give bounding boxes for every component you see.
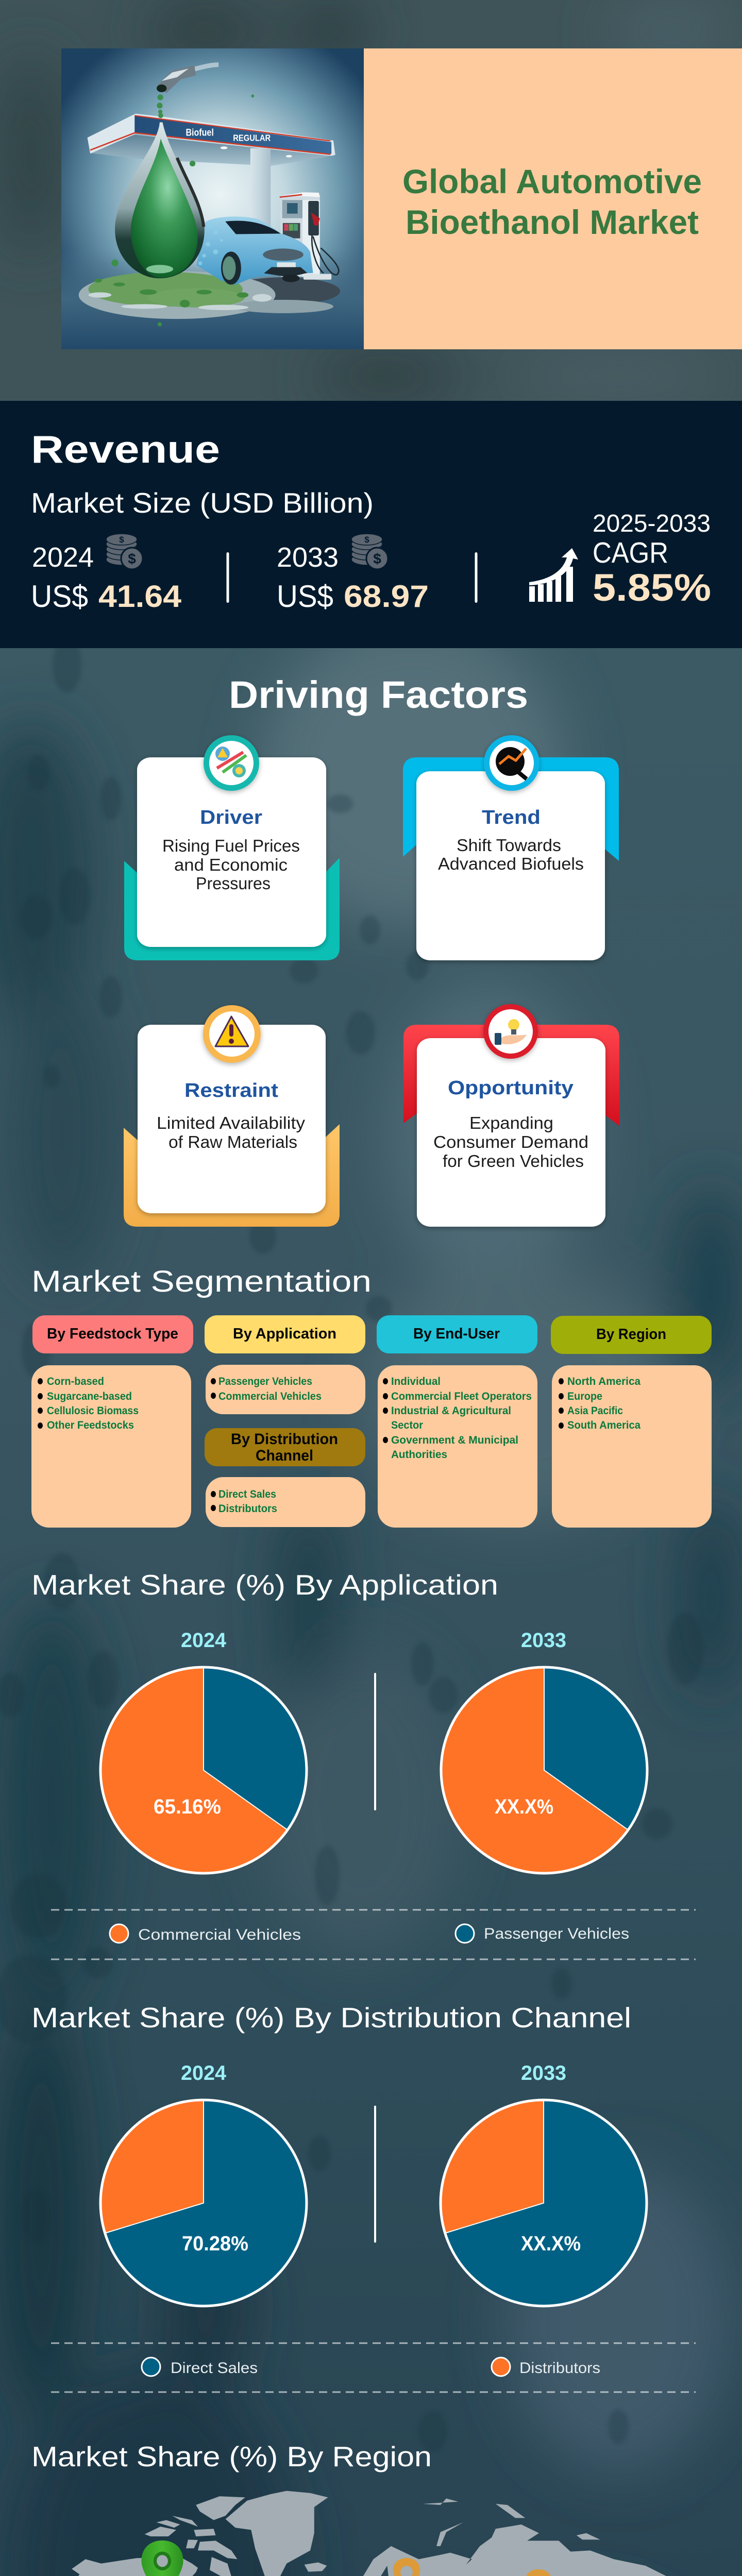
- card text: Consumer Demand: [433, 1132, 588, 1151]
- list: region items: Europe: [567, 1391, 602, 1402]
- panel: by distribution channel: By Distribution: [231, 1431, 338, 1448]
- list: application items: Passenger Vehicles: [218, 1376, 312, 1387]
- list: end-user items: Authorities: [391, 1449, 447, 1461]
- icon: restraint warning: [203, 1005, 261, 1063]
- list: end-user items: Commercial Fleet Operators: [391, 1391, 532, 1402]
- icon: coins: [106, 534, 143, 569]
- panel: by feedstock type: [31, 1315, 193, 1528]
- chart: distribution pie 2024: [100, 2062, 307, 2306]
- panel: by feedstock type: By Feedstock Type: [47, 1326, 178, 1342]
- panel: revenue: [0, 401, 742, 648]
- stat: CAGR: [593, 510, 711, 609]
- title text: Bioethanol Market: [406, 203, 699, 241]
- chart: world map: [72, 2491, 667, 2576]
- list: feedstock items: Other Feedstocks: [47, 1419, 134, 1431]
- icon: coins: $: [119, 535, 124, 545]
- list: end-user items: Industrial & Agricultural: [391, 1405, 511, 1417]
- chart: application pie 2024: 65.16%: [154, 1795, 221, 1818]
- list: end-user items: Sector: [391, 1419, 423, 1431]
- icon: opportunity: [483, 1004, 538, 1059]
- icon: blue car: [196, 216, 313, 285]
- icon: ground with leaves: [79, 271, 340, 319]
- chart: distribution pie 2024: 70.28%: [182, 2232, 248, 2255]
- legend: application: [51, 1910, 696, 1959]
- title text: Global Automotive: [402, 162, 702, 200]
- list: distribution items: [211, 1488, 277, 1515]
- heading: driving factors: Driving Factors: [229, 673, 528, 716]
- icon: gas pump: [279, 192, 339, 280]
- list: application items: Commercial Vehicles: [218, 1391, 322, 1402]
- chart: distribution pie 2024: 2024: [181, 2062, 227, 2084]
- card text: Advanced Biofuels: [438, 854, 584, 873]
- list: end-user items: Government & Municipal: [391, 1434, 518, 1446]
- chart: application pie 2024: 2024: [181, 1629, 227, 1652]
- icon: fuel station canopy: Biofuel: [185, 127, 214, 138]
- pin: North America highlighted: [141, 2540, 183, 2576]
- card text: Shift Towards: [457, 836, 561, 855]
- panel: driver card: [124, 735, 340, 960]
- icon: driver: [204, 735, 259, 791]
- legend: application: Commercial Vehicles: [138, 1926, 301, 1943]
- panel: by end-user: [377, 1315, 537, 1528]
- icon: coins: $: [364, 535, 369, 545]
- chart: application pie 2033: [441, 1629, 647, 1873]
- legend: distribution channel: [51, 2343, 696, 2392]
- panel: by end-user: By End-User: [413, 1326, 500, 1342]
- stat: 2033 revenue: 2033: [277, 542, 339, 573]
- panel: opportunity card: [403, 1004, 619, 1227]
- stat: CAGR: 2025-2033: [593, 510, 711, 537]
- card text: [433, 1113, 588, 1171]
- panel: restraint card: [124, 1005, 340, 1227]
- legend: distribution channel: Distributors: [519, 2360, 600, 2377]
- icon: trend: [484, 735, 539, 791]
- subheading: market size: Market Size (USD Billion): [31, 487, 374, 519]
- title text: [402, 162, 702, 241]
- card text: Rising Fuel Prices: [162, 836, 300, 855]
- panel: by application: [205, 1315, 365, 1414]
- list: feedstock items: [38, 1376, 139, 1431]
- card text: [438, 836, 584, 873]
- stat: 2033 revenue: 68.97: [344, 579, 429, 614]
- stat: 2024 revenue: [31, 542, 182, 614]
- card text: of Raw Materials: [168, 1132, 297, 1151]
- hero image panel: biofuel drop and filling station: [61, 48, 364, 349]
- icon: coins: $: [128, 551, 136, 567]
- panel: by application: By Application: [233, 1326, 336, 1342]
- chart: distribution pie 2033: 2033: [521, 2062, 566, 2084]
- heading: revenue: Revenue: [31, 428, 220, 471]
- card title: Trend: [482, 807, 541, 828]
- legend: application: Passenger Vehicles: [484, 1925, 629, 1942]
- icon: coins: $: [373, 551, 381, 567]
- chart: distribution pie 2033: XX.X%: [521, 2232, 581, 2255]
- card title: Opportunity: [448, 1077, 574, 1099]
- heading: market share by distribution channel: Market Share (%) By Distribution Channel: [31, 2002, 631, 2033]
- icon: fuel station canopy: REGULAR: [233, 133, 271, 143]
- list: distribution items: Direct Sales: [218, 1488, 276, 1500]
- list: region items: Asia Pacific: [567, 1405, 623, 1417]
- stat: 2024 revenue: 41.64: [98, 579, 182, 614]
- card text: for Green Vehicles: [443, 1151, 584, 1171]
- panel: by distribution channel: Channel: [256, 1447, 313, 1464]
- icon: fuel nozzle: [111, 65, 254, 327]
- stat: 2024 revenue: 2024: [32, 542, 94, 573]
- card text: Limited Availability: [157, 1113, 306, 1132]
- list: application items: [211, 1376, 322, 1402]
- panel: by distribution channel: [205, 1428, 365, 1527]
- stat: 2033 revenue: [277, 542, 429, 614]
- list: region items: [559, 1376, 640, 1431]
- heading: market segmentation: Market Segmentation: [31, 1265, 372, 1298]
- list: end-user items: Individual: [391, 1376, 441, 1387]
- list: end-user items: [383, 1376, 532, 1461]
- chart: application pie 2033: XX.X%: [495, 1795, 553, 1818]
- pin: Asia: [525, 2569, 552, 2576]
- stat: CAGR: CAGR: [593, 536, 668, 569]
- list: region items: South America: [567, 1419, 640, 1431]
- stat: 2024 revenue: US$: [31, 579, 88, 614]
- card title: Restraint: [184, 1080, 278, 1101]
- legend: distribution channel: Direct Sales: [171, 2360, 258, 2377]
- chart: application pie 2024: [100, 1629, 307, 1873]
- title panel: [364, 48, 742, 349]
- card text: Expanding: [469, 1113, 553, 1132]
- icon: fuel station canopy: [88, 114, 335, 229]
- panel: by region: [551, 1316, 712, 1528]
- chart: application pie 2033: 2033: [521, 1629, 566, 1652]
- card text: [162, 836, 300, 893]
- card text: Pressures: [196, 874, 271, 893]
- list: region items: North America: [567, 1376, 640, 1387]
- stat: CAGR: 5.85%: [593, 566, 711, 609]
- heading: market share by application: Market Share (%) By Application: [31, 1569, 498, 1601]
- list: feedstock items: Sugarcane-based: [47, 1391, 132, 1402]
- icon: green fuel drop: [115, 122, 205, 278]
- stat: 2033 revenue: US$: [277, 579, 333, 614]
- heading: market share by region: Market Share (%) By Region: [31, 2441, 432, 2472]
- card title: Driver: [200, 807, 262, 828]
- list: feedstock items: Cellulosic Biomass: [47, 1405, 139, 1417]
- panel: trend card: [403, 735, 619, 960]
- list: distribution items: Distributors: [218, 1503, 277, 1515]
- card text: [157, 1113, 306, 1151]
- icon: coins: [351, 534, 388, 569]
- icon: growth arrow: [529, 548, 578, 602]
- card text: and Economic: [174, 855, 288, 874]
- pin: Europe: [393, 2558, 420, 2576]
- chart: distribution pie 2033: [441, 2062, 647, 2306]
- list: feedstock items: Corn-based: [47, 1376, 104, 1387]
- panel: by region: By Region: [596, 1326, 666, 1343]
